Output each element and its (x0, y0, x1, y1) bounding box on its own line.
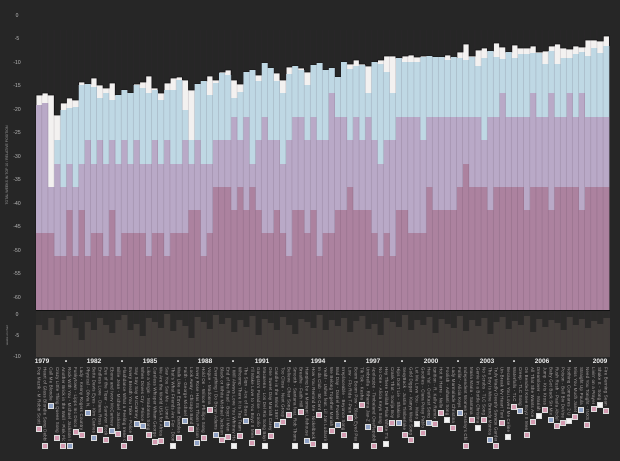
song labels: Waterfalls - TLC (512, 367, 517, 402)
song labels: Creep - TLC Song (518, 367, 523, 406)
year labels: • (65, 358, 68, 365)
year labels (35, 358, 608, 365)
song labels: Hot in Herre - Nelly (439, 367, 444, 408)
year labels: 1985 (143, 358, 158, 365)
year labels: 2006 (535, 358, 550, 365)
song labels: Irreplaceable - Beyonce Song (341, 367, 346, 430)
song labels: All That She Wants Ace (530, 367, 535, 417)
song labels: Yeah! - Usher feat. Lil Jon Ludacris (323, 367, 328, 441)
year labels: • (457, 358, 460, 365)
song labels: Call Me Blondie (49, 367, 54, 401)
y axis labels: -55 (13, 271, 21, 277)
song labels: Say Say Say McCartney (134, 367, 139, 419)
y axis labels: -5 (15, 36, 19, 42)
song labels: End of the Road - Boyz II Men (225, 367, 230, 432)
song labels: We Belong Together Mariah (329, 367, 334, 426)
song labels: Say You Say Me - Lionel (165, 367, 170, 419)
y axis labels: -60 (13, 295, 21, 301)
song labels: Breathe - Faith Hill (299, 367, 304, 407)
year labels: • (177, 358, 180, 365)
song labels: SexyBack - Justin Timberlake (402, 367, 407, 430)
year labels: 2009 (593, 358, 608, 365)
y axis labels (13, 13, 21, 360)
song labels: Physical - Olivia N. (85, 367, 90, 408)
song labels: Every Rose Has Its Thorn Poison (195, 367, 200, 438)
year labels: 2003 (480, 358, 495, 365)
song labels: Foolish - Ashanti Song (445, 367, 450, 415)
song labels: Faith - George Michael (183, 367, 188, 416)
y axis labels: -30 (13, 154, 21, 160)
song labels: Every Breath You Take - Police (128, 367, 133, 433)
year labels: 1997 (366, 358, 381, 365)
song labels: Look Away - Chicago Band (189, 367, 194, 424)
song labels: Ebony and Ivory McCartney (110, 367, 115, 426)
song labels: Lady Marmalade Christina (451, 367, 456, 423)
song labels: Miss You Much Janet (573, 367, 578, 412)
song labels: Tik Tok - Kesha (360, 367, 365, 400)
y axis labels: -40 (13, 201, 21, 207)
song labels: Need You Tonight - INXS (585, 367, 590, 420)
song labels: I'll Make Love to You Boyz II Men (250, 367, 255, 438)
year labels: • (513, 358, 516, 365)
y axis labels: -10 (13, 60, 21, 66)
song labels: Gold Digger - Kanye West Song (408, 367, 413, 435)
song labels: Hey There Delilah Plain White T's (384, 367, 389, 439)
song labels: Jump - Kris Kross (542, 367, 547, 405)
y axis title: TOTAL WEEKS IN TOP 10 / RELATIVE POSITION (5, 125, 9, 205)
song labels: Vogue - Madonna (207, 367, 212, 405)
lower panel: weeks bars (36, 311, 610, 357)
song labels: Whoomp There It Is Tag Team (238, 367, 243, 431)
song labels: Gangsta's Paradise - Coolio (256, 367, 261, 427)
song labels: Un-Break My Heart Toni (500, 367, 505, 418)
year labels: • (289, 358, 292, 365)
year labels: 1994 (311, 358, 326, 365)
song labels: We Are the World USA for Africa (158, 367, 163, 436)
song labels: In da Club - 50 Cent (317, 367, 322, 410)
stacked bars (36, 30, 610, 310)
song labels: Hips Don't Lie - Shakira (396, 367, 401, 418)
song labels: No Scrubs - TLC Song (481, 367, 486, 415)
song labels: Walk Like an Egyptian Bangles (177, 367, 182, 433)
song labels: Black or White Michael Jackson (219, 367, 224, 435)
song labels: Like a Virgin - Madonna Song (146, 367, 151, 430)
song labels: Maria Maria - Santana (469, 367, 474, 415)
song labels: Careless Whisper Wham George (152, 367, 157, 437)
song labels (36, 367, 609, 449)
y axis labels: -50 (13, 248, 21, 254)
song labels: Candle in the Wind 1997 (274, 367, 279, 420)
chart: weeks on chart (5, 325, 9, 345)
song labels: How You Remind Me - Nickelback (311, 367, 316, 439)
song labels: Bette Davis Eyes - Kim Carnes (91, 367, 96, 433)
song labels: Crazy Little Thing Queen Song (55, 367, 60, 433)
song labels: Hanging by a Moment Lifehouse (305, 367, 310, 436)
year labels: • (121, 358, 124, 365)
song labels: Eye of the Tiger - Survivor Rock (104, 367, 109, 435)
song labels: Nothing Compares 2 U (567, 367, 572, 416)
y axis labels: 0 (16, 13, 19, 19)
song labels: Lady - Kenny Rogers Country (79, 367, 84, 430)
song labels: Fire Burning Sean (603, 367, 608, 406)
song labels: Believe - Cher Song (286, 367, 291, 410)
song labels: Ignition - R. Kelly Remix (433, 367, 438, 419)
song labels: Everything I Do Bryan Adams (213, 367, 218, 430)
song labels: Livin' on a Prayer (591, 367, 596, 404)
song labels: Pop Muzik - M Robin Scott (37, 367, 42, 424)
y axis labels: -5 (15, 333, 19, 339)
song labels: Dreamlover - Mariah (536, 367, 541, 411)
year labels: • (344, 358, 347, 365)
year labels: 2000 (424, 358, 439, 365)
song labels: Because You Loved Me Celine (506, 367, 511, 432)
y axis labels: -25 (13, 130, 21, 136)
y axis labels: -35 (13, 177, 21, 183)
y axis labels: -10 (13, 354, 21, 360)
song labels: Let Me Love You - Mario (414, 367, 419, 419)
y axis labels: 0 (16, 312, 19, 318)
y axis labels: -20 (13, 107, 21, 113)
song labels: On Bended Knee Boyz II Men (524, 367, 529, 430)
song labels: The Sign - Ace of Base (244, 367, 249, 416)
year labels: 1979 (35, 358, 50, 365)
song labels: Fallin' - Alicia Keys (457, 367, 462, 408)
song labels: Rush Rush - Paula Abdul (555, 367, 560, 421)
song labels: Baby Got Back Sir Mix (548, 367, 553, 415)
chart (5, 13, 610, 365)
year labels: 1982 (87, 358, 102, 365)
song labels: Genie in a Bottle Christina (475, 367, 480, 423)
song labels: Umbrella - Rihanna Jay-Z (366, 367, 371, 422)
song labels: Low - Flo Rida T-Pain (347, 367, 352, 413)
song labels: One Sweet Day Mariah Carey (268, 367, 273, 431)
song labels: The Boy Is Mine Brandy Monica (487, 367, 492, 435)
song labels: Endless Love - Diana Ross (97, 367, 102, 425)
song labels: Poison - Bell Biv DeVoe (561, 367, 566, 418)
song labels: Crank That - Soulja Boy (390, 367, 395, 418)
song labels: Bad Day - Daniel Powter (335, 367, 340, 420)
song labels: Goodies - Ciara Petey Pablo (420, 367, 425, 428)
y axis labels: -15 (13, 83, 21, 89)
year labels: 1988 (198, 358, 213, 365)
year labels: • (401, 358, 404, 365)
song labels: Hey Ya! - OutKast Song (427, 367, 432, 418)
year labels: • (232, 358, 235, 365)
song labels: Truly Madly Deeply Savage Garden (494, 367, 499, 441)
year labels: • (569, 358, 572, 365)
song labels: Shake It - Song (597, 367, 602, 400)
y axis labels: -45 (13, 224, 21, 230)
song labels: No One - Alicia Keys Song (378, 367, 383, 424)
song labels: Billie Jean - Michael Jackson (116, 367, 121, 429)
song labels: Straight Up Paula (579, 367, 584, 405)
year labels: 1991 (255, 358, 270, 365)
song labels: Too Close - Next Group (280, 367, 285, 417)
song labels: Funkytown - Lipps Inc Disco (73, 367, 78, 427)
song labels: When Doves Cry - Prince (140, 367, 145, 421)
song labels: Hold On - Wilson Phillips Song (201, 367, 206, 433)
